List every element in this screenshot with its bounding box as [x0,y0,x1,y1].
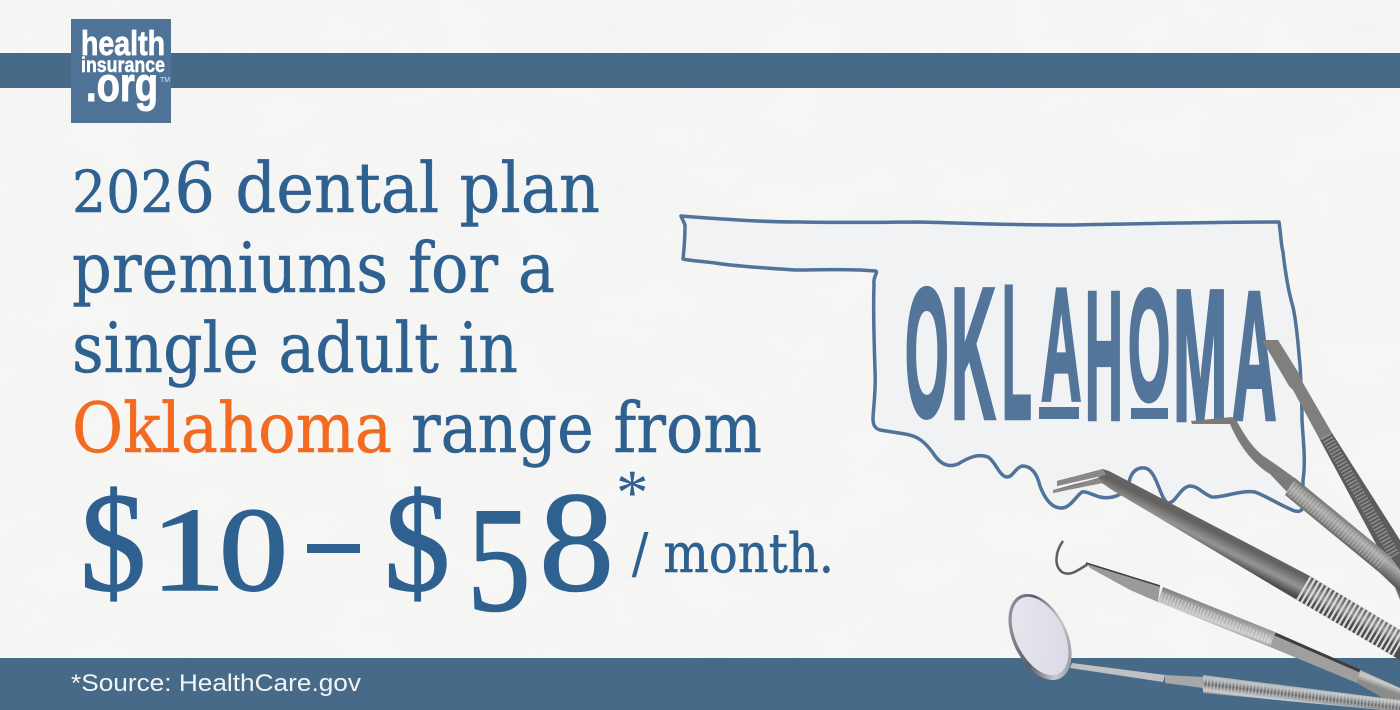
price range: $ [80,464,146,621]
logo: healthinsurance.org: TM [160,77,170,84]
logo: healthinsurance.org: insurance [81,54,165,77]
state name lettering: OKLAHOMA [905,247,1277,460]
price range: $ [384,464,450,621]
headline line 3: single adult in [72,309,518,389]
logo: healthinsurance.org: .org [86,59,158,112]
price range: 0 [219,483,288,616]
state name lettering: OKLAHOMA: M [1173,250,1228,460]
state name lettering: OKLAHOMA: A [1232,253,1277,458]
instrument: probe [1056,541,1400,708]
price range: * [616,457,648,529]
state name lettering: OKLAHOMA: H [1085,253,1123,458]
logo: healthinsurance.org: health [81,25,165,63]
state name lettering: OKLAHOMA: L [1002,247,1032,459]
state name lettering: OKLAHOMA: O [1128,257,1170,435]
instrument: dental mirror [996,584,1400,710]
price range [80,457,648,643]
source note: *Source: HealthCare.gov [71,670,361,697]
logo: healthinsurance.org [71,19,171,123]
instrument: explorer [1191,417,1400,592]
instrument: spatula [1262,340,1400,600]
bottom band [0,658,1400,710]
price range: 1 [150,483,226,616]
price range: 8 [539,462,614,621]
headline line 4: range from: range from [411,389,762,469]
headline line 2: premiums for a [72,229,555,309]
per month label: / month. [632,522,834,585]
state outline of Oklahoma [681,216,1304,511]
state name lettering: OKLAHOMA: K [951,249,996,458]
price range: 5 [467,477,531,643]
headline line 1: 2026 dental plan [72,149,600,229]
instrument: tweezers [1053,469,1400,660]
top band [0,53,1400,88]
state name lettering: OKLAHOMA: O [905,250,949,455]
state name lettering: OKLAHOMA: A [1041,254,1082,435]
headline [72,149,762,469]
headline line 4: state name: Oklahoma [72,389,392,469]
